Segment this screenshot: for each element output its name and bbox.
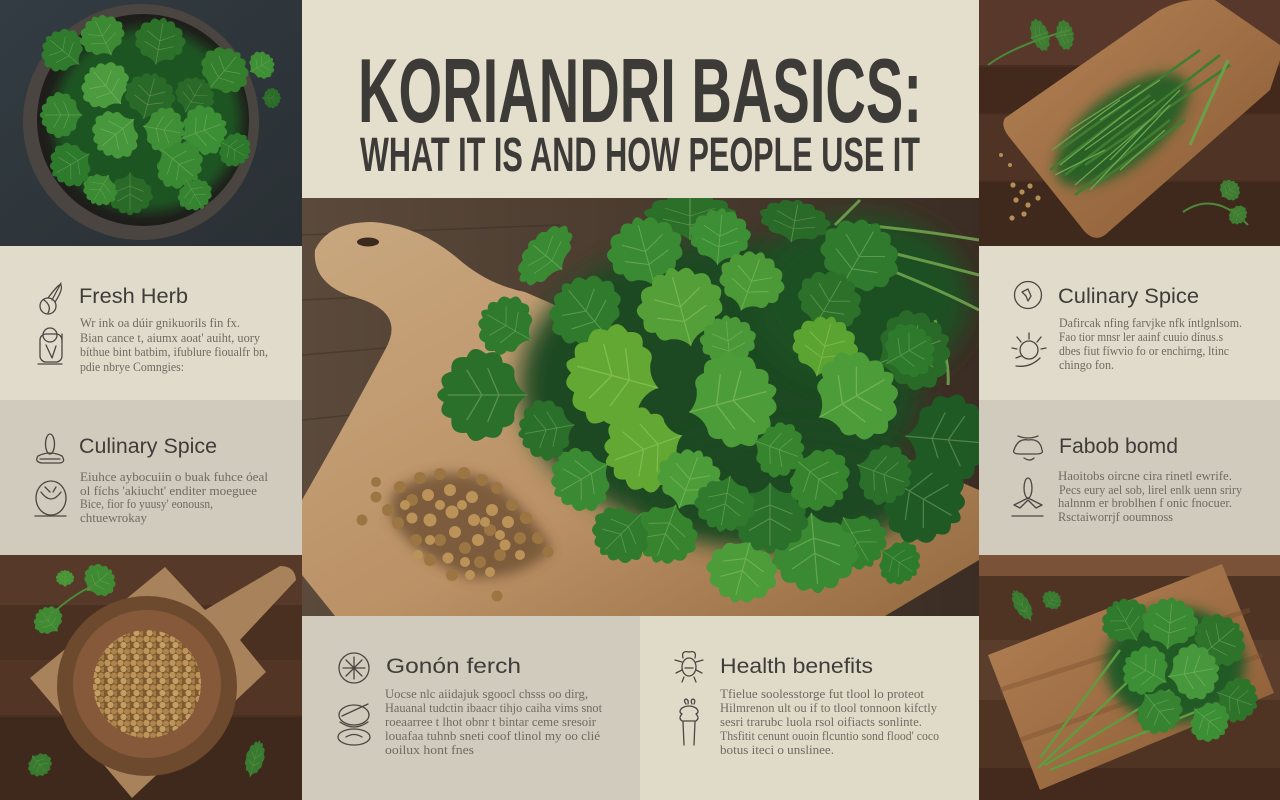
- description: dbes fiut fíwvio fo or enchirng, ltinc: [1059, 344, 1230, 358]
- icon: spice bowl: [35, 481, 66, 516]
- description: Bian cance t, aiumx aoat' auiht, uory: [80, 331, 261, 345]
- icon: herb brush: [40, 283, 61, 314]
- panel: culinary spice left: [0, 400, 302, 555]
- icon: sun herb: [1012, 333, 1046, 366]
- main title: KORIANDRI BASICS:: [358, 41, 922, 142]
- icon: plant: [1012, 478, 1043, 516]
- photo: wooden board with dill fronds: [979, 0, 1280, 246]
- description: chingo fon.: [1059, 358, 1114, 372]
- photo: parsley on wooden board: [979, 555, 1280, 800]
- description: chtuewrokay: [80, 511, 148, 525]
- description: [1059, 316, 1242, 372]
- description: botus iteci o unslinee.: [720, 743, 834, 757]
- description: Fao tior mnsr ler aainf cuuio dínus.s: [1059, 330, 1223, 344]
- icon: sun flower: [675, 652, 703, 682]
- description: Eiuhce aybocuiin o buak fuhce óeal: [80, 470, 269, 484]
- heading: Health benefits: [720, 655, 873, 678]
- title panel: [302, 0, 979, 198]
- description: Rsctaiworrjf ooumnoss: [1058, 510, 1173, 524]
- description: ooilux hont fnes: [385, 743, 474, 757]
- description: Hilmrenon ult ou if to tlool tonnoon kifctly: [720, 701, 938, 715]
- heading: Fresh Herb: [79, 285, 188, 308]
- coriander seeds pile: [356, 467, 554, 602]
- icon: stacked dishes: [338, 704, 370, 745]
- cutting board: [302, 222, 979, 616]
- icon: herb jar: [38, 328, 62, 364]
- description: Wr ink oa dúir gnikuorils fin fx.: [80, 316, 240, 330]
- description: roeaarree t lhot obnr t bintar ceme sresoir: [385, 715, 596, 729]
- subtitle: WHAT IT IS AND HOW PEOPLE USE IT: [360, 129, 920, 182]
- heading: Culinary Spice: [1058, 285, 1199, 308]
- description: louafaa tuhnb sneti coof tlinol my oo clié: [385, 729, 600, 743]
- description: [80, 316, 268, 374]
- herb mass: [437, 192, 994, 612]
- main photo: coriander leaves and seeds on cutting board: [302, 192, 994, 616]
- panel: gonon ferch: [302, 616, 640, 800]
- icon: spice burner: [37, 434, 64, 463]
- panel: fabob bomd: [979, 400, 1280, 555]
- description: [1058, 469, 1243, 524]
- description: Dafircak nfing farvjke nfk íntlgnlsom.: [1059, 316, 1242, 330]
- photo: cilantro in dark bowl: [0, 0, 302, 246]
- description: Uocse nlc aiidajuk sgoocl chsss oo dirg,: [385, 687, 588, 701]
- description: Haoitobs oircne cira rinetl ewrife.: [1058, 469, 1232, 483]
- description: halnnm er broblhen f onic fnocuer.: [1058, 496, 1232, 510]
- icon: mushroom: [1014, 436, 1042, 460]
- description: Bice, fior fo yuusy' eonousn,: [80, 497, 213, 511]
- icon: circle leaf: [1014, 282, 1042, 308]
- description: ol fíchs 'akiucht' enditer moeguee: [80, 484, 257, 498]
- description: Hauanal tudctin ibaacr tihjo caiha vims snot: [385, 701, 603, 715]
- description: Pecs eury ael sob, lirel enlk uenn sriry: [1059, 483, 1243, 497]
- panel: fresh herb: [0, 246, 302, 400]
- icon: seed wheel: [339, 653, 369, 683]
- heading: Fabob bomd: [1059, 435, 1178, 458]
- description: [720, 687, 939, 757]
- panel: health benefits: [640, 616, 979, 800]
- description: [385, 687, 603, 757]
- description: bíthue bint batbim, ifublure fioualfr bn,: [80, 345, 268, 359]
- description: sesri trarubc luola rsol oifiacts sonlinte.: [720, 715, 922, 729]
- description: Tfielue soolesstorge fut tlool lo proteot: [720, 687, 925, 701]
- description: pdie nbrye Comngies:: [80, 360, 184, 374]
- description: Thsfitit cenunt ouoin flcuntio sond flood' coco: [720, 729, 939, 743]
- panel: culinary spice right: [979, 246, 1280, 400]
- heading: Culinary Spice: [79, 435, 217, 458]
- heading: Gonón ferch: [386, 655, 521, 678]
- description: [80, 470, 269, 525]
- icon: stool with sprout: [680, 699, 698, 745]
- photo: seeds in wooden bowl: [0, 555, 302, 800]
